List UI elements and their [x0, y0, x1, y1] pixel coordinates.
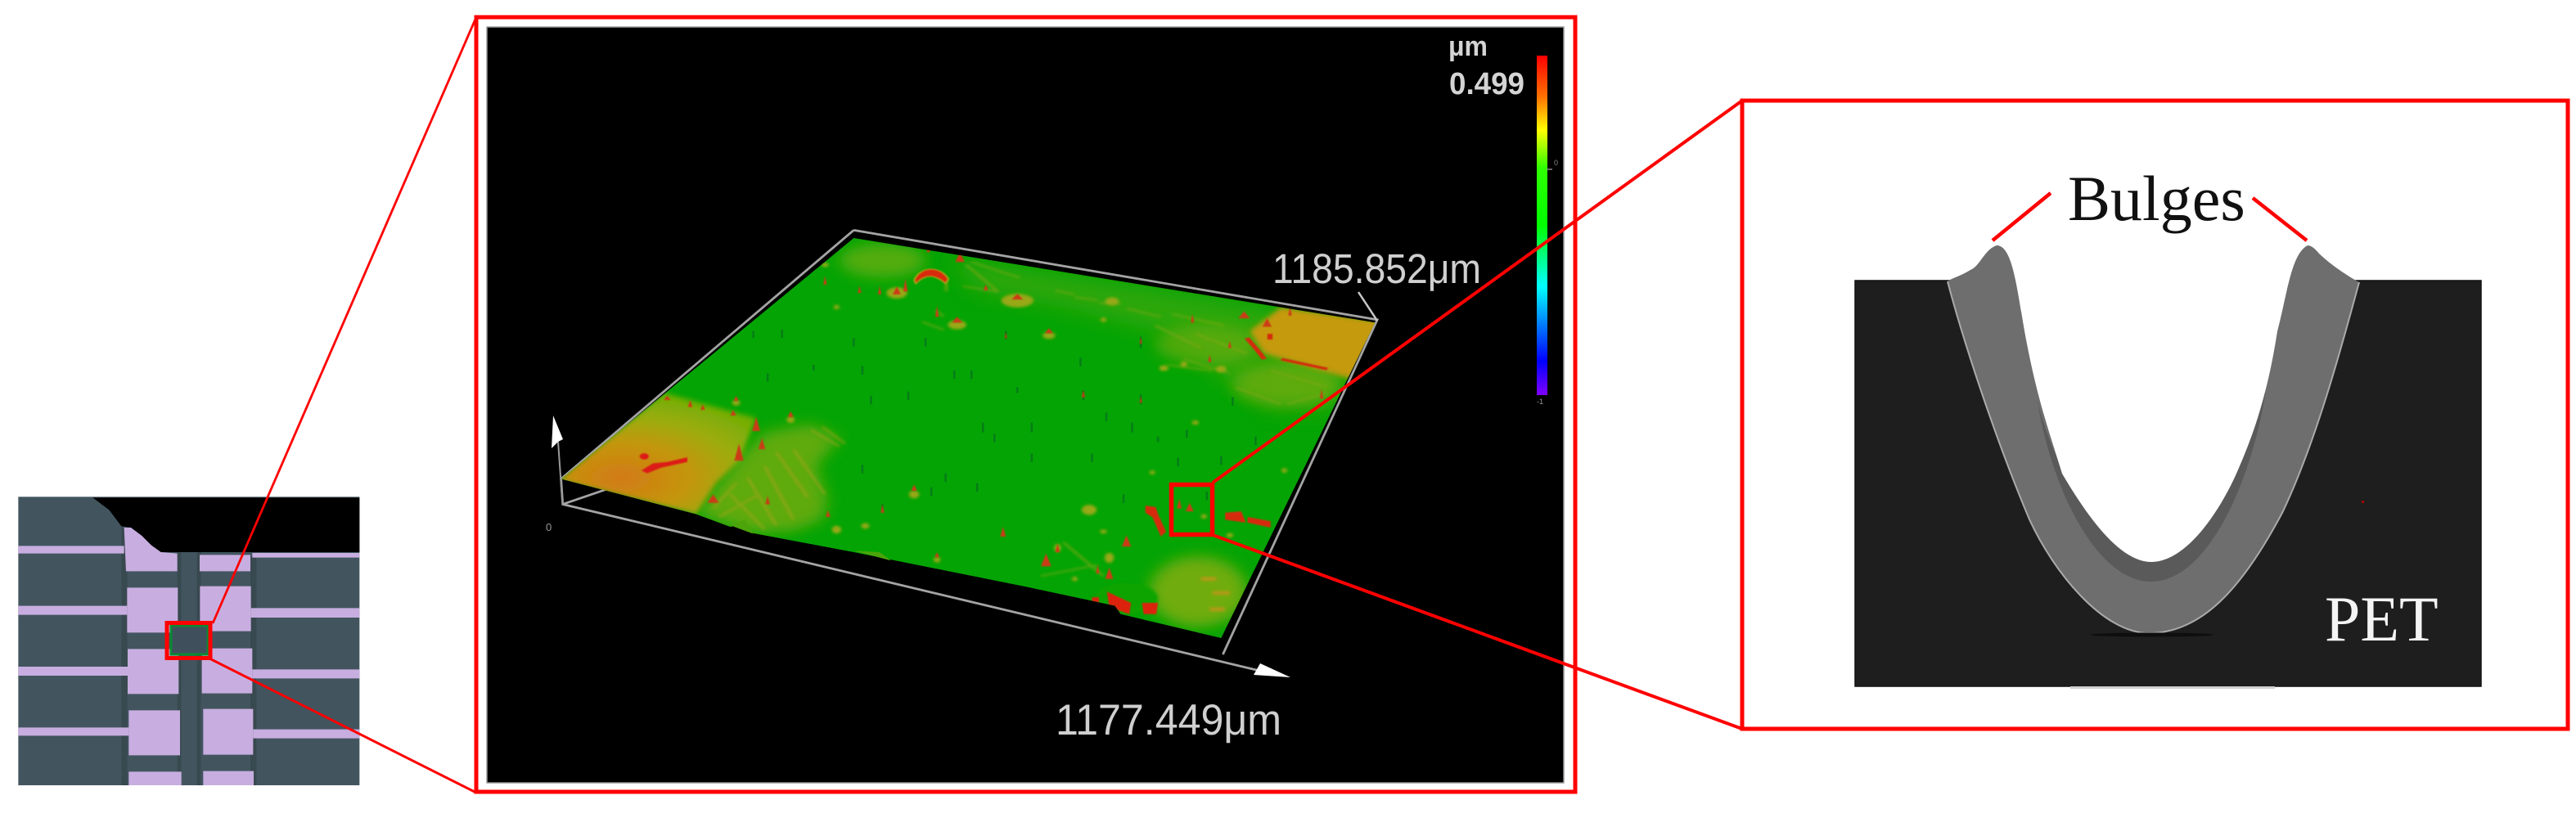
upper mottled streaks	[922, 262, 1327, 576]
upper mottled band	[948, 258, 1339, 410]
black plot area	[487, 27, 1564, 783]
dark vertical markers	[754, 330, 1255, 513]
micrograph background	[18, 497, 359, 785]
height axis arrowhead	[552, 416, 563, 448]
panel frame	[1742, 101, 2568, 729]
left mottled stripes	[713, 427, 845, 529]
right orange corner	[1250, 307, 1385, 379]
left red hot spot	[640, 453, 687, 474]
black unscanned region	[92, 497, 359, 552]
right bulge pointer	[2253, 198, 2307, 240]
depth dimension label: 1185.852μm	[1272, 245, 1481, 292]
red clump at lower edge	[1092, 591, 1158, 614]
width axis arrowhead	[1254, 663, 1290, 677]
groove shadow under layer	[2091, 633, 2213, 636]
red ridge on right	[1247, 334, 1327, 369]
zoom lines: micrograph to profile	[211, 17, 476, 793]
red selection box	[167, 623, 210, 658]
colour scale bar	[1537, 56, 1547, 395]
maximum value label: 0.499	[1449, 67, 1524, 101]
panel: 3D surface profile	[476, 17, 1575, 792]
substrate label: PET	[2325, 583, 2439, 654]
red arc at far edge	[914, 269, 948, 284]
bottom-right yellow-green patch	[1150, 556, 1247, 627]
groove interior and deposited layer	[1948, 245, 2359, 636]
panel frame	[476, 17, 1575, 792]
jagged lower edge	[731, 519, 891, 560]
red selection box on surface	[1172, 484, 1213, 535]
red height spikes	[664, 244, 1323, 579]
stray red speck	[2362, 501, 2364, 503]
left mottled zone	[696, 424, 840, 533]
green base surface	[561, 238, 1375, 638]
PET substrate block	[1855, 281, 2481, 686]
right yellow-green transition	[1232, 363, 1342, 406]
soft cone bases	[732, 263, 1287, 581]
white groove cavity	[1997, 245, 2308, 562]
colour scale min label: -1	[1537, 398, 1543, 406]
width dimension label: 1177.449μm	[1056, 696, 1281, 744]
smudge under block	[2070, 686, 2275, 689]
green pocket in lower patch	[1095, 583, 1158, 614]
left orange corner	[558, 393, 756, 515]
axis zero label: 0	[546, 521, 552, 533]
darker inner layer	[2038, 384, 2267, 582]
green inspection window	[171, 626, 208, 654]
unit label: μm	[1448, 31, 1488, 62]
height axis	[552, 416, 563, 505]
metal leads	[18, 546, 359, 739]
depth dimension leader	[1358, 292, 1377, 321]
deposited metal layer	[1948, 245, 2359, 633]
left bulge pointer	[1993, 193, 2051, 240]
far corner yellow-green patch	[840, 244, 925, 277]
dark pad borders	[121, 528, 256, 785]
zoom lines: profile to cross-section	[1213, 101, 1742, 729]
yellow spots in lower patch	[1201, 579, 1230, 609]
bounding wireframe	[561, 230, 1377, 671]
metal pads	[124, 528, 254, 785]
panel: groove cross-section	[1742, 101, 2568, 729]
3D surface map	[560, 229, 1380, 671]
bulges label: Bulges	[2068, 163, 2245, 234]
light outer edge	[1948, 281, 2359, 633]
panel: optical micrograph of electrode array	[18, 497, 359, 785]
colour scale tick	[1547, 169, 1552, 170]
red ridges near selected box	[1146, 506, 1271, 537]
colour scale mid label: 0	[1554, 159, 1558, 167]
